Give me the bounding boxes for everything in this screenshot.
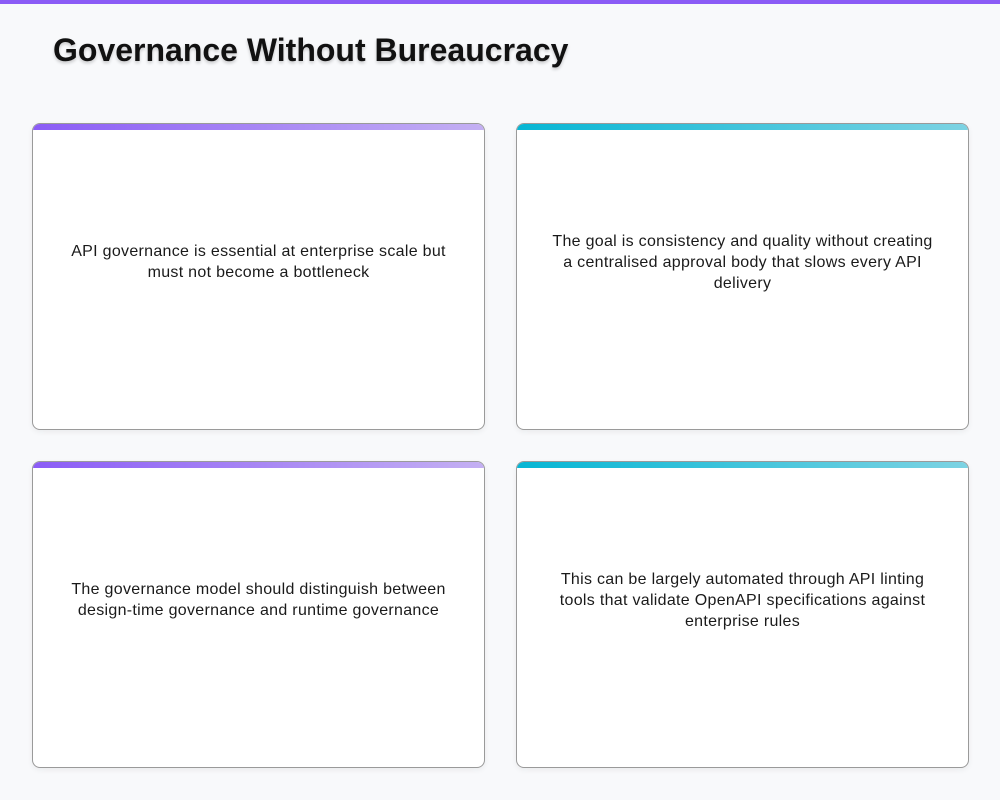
text: card 1: [71, 243, 446, 281]
text: card 2: The goal is consistency and quality without creating: [552, 232, 933, 250]
top accent bar: [0, 0, 1000, 4]
text: card 3: [71, 581, 446, 619]
text: card 2: delivery: [714, 274, 771, 292]
panel: card 2: [516, 123, 969, 430]
text: card 3: design-time governance and runtime governance: [78, 602, 439, 619]
text: card 2: [552, 232, 933, 292]
text: card 3: The governance model should distinguish between: [71, 581, 446, 598]
text: card 1: API governance is essential at enterprise scale but: [71, 243, 446, 260]
panel: card 4: [516, 461, 969, 768]
text: card 4: enterprise rules: [685, 612, 800, 630]
title: Governance Without Bureaucracy: [53, 32, 568, 68]
text: card 2: a centralised approval body that slows every API: [563, 254, 922, 270]
text: card 1: must not become a bottleneck: [148, 264, 369, 281]
panel: card 1: [32, 123, 485, 430]
text: card 4: [560, 570, 925, 630]
text: card 4: This can be largely automated through API linting: [561, 570, 924, 588]
panel: card 3: [32, 461, 485, 768]
text: card 4: tools that validate OpenAPI specifications against: [560, 592, 925, 608]
